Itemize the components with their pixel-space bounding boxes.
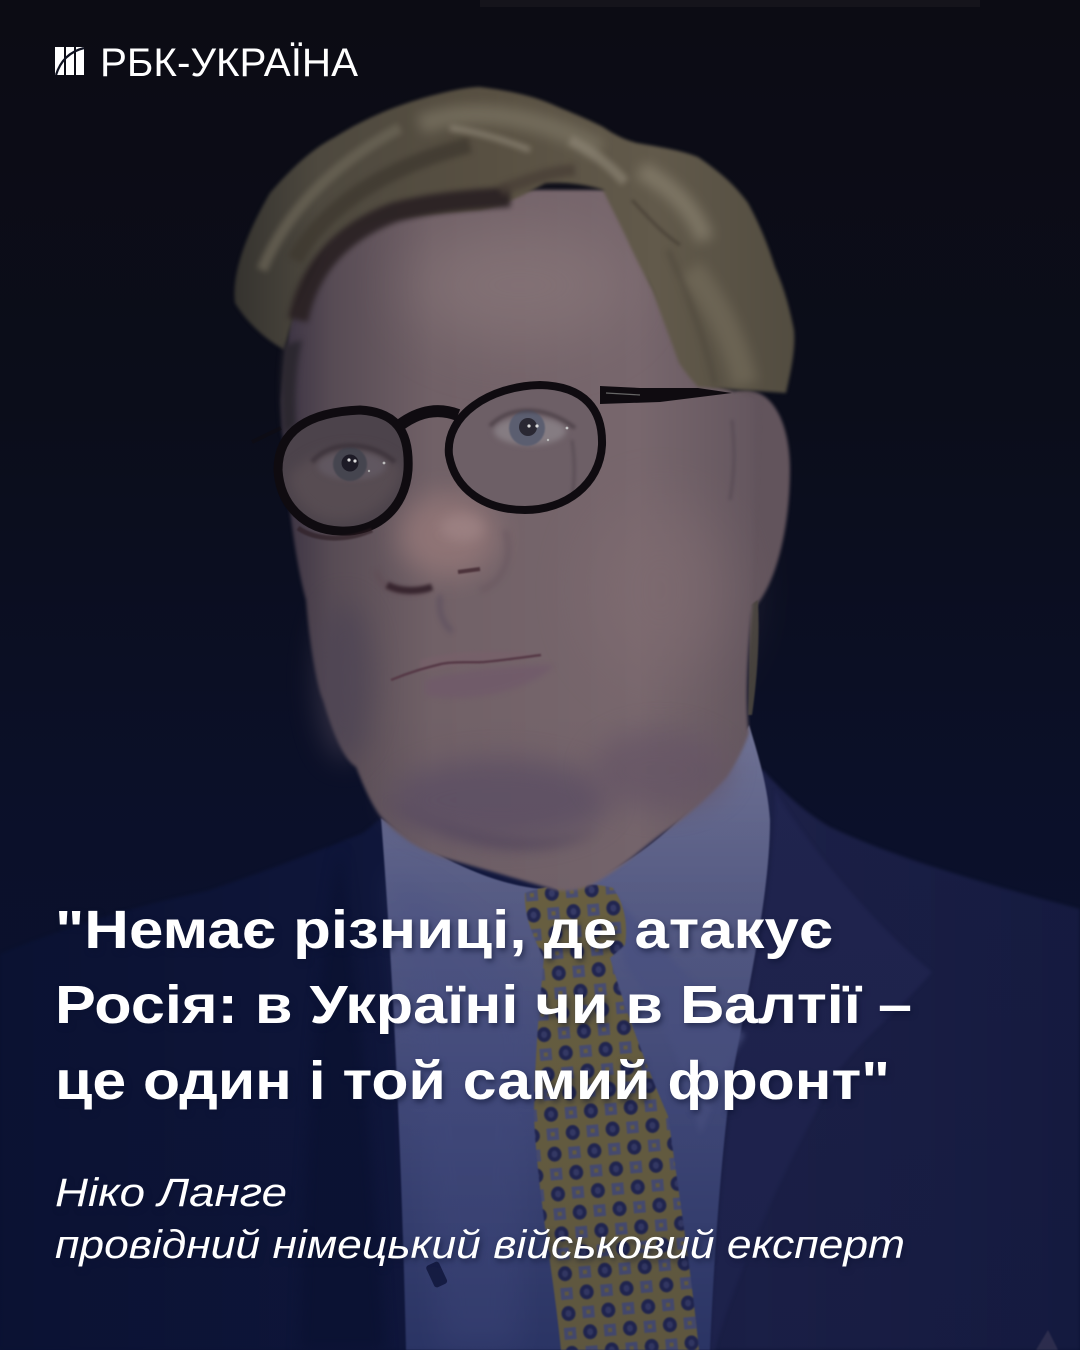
attribution [55,1171,905,1267]
quote headline: "Немає різниці, де атакує [55,900,833,960]
quote headline [55,900,912,1111]
logo mark [55,47,84,75]
right lens [449,385,602,510]
shirt left shadow [390,870,535,1350]
quote headline: Росія: в Україні чи в Балтії – [55,975,912,1035]
logo wordmark: РБК-УКРАЇНА [100,41,358,85]
attribution: провідний німецький військовий експерт [55,1223,905,1267]
jacket [0,770,1080,1350]
lapel microphone [425,1261,448,1288]
bottom navy overlay [0,700,1080,1350]
pocket square [1036,1330,1058,1350]
nose [376,493,508,632]
right lapel [710,790,932,1350]
hair shadow and highlights [262,115,745,385]
temple arm [600,386,732,404]
left lapel shadow [300,850,385,1350]
face [281,190,760,891]
shirt [381,725,770,1350]
right eye [490,410,575,446]
shirt collar fold [612,895,745,1135]
frames [252,385,602,538]
hair left shadow strip [281,340,302,435]
mouth [391,651,555,698]
face shading [317,225,734,848]
ear [730,390,790,612]
glasses [252,385,732,538]
logo [55,41,358,85]
hair [234,87,794,393]
left lens [278,410,408,531]
tie [525,884,699,1350]
quote headline: це один і той самий фронт" [55,1051,890,1111]
side hair below ear [748,600,759,715]
left eye [312,446,395,481]
attribution: Ніко Ланге [55,1171,287,1215]
